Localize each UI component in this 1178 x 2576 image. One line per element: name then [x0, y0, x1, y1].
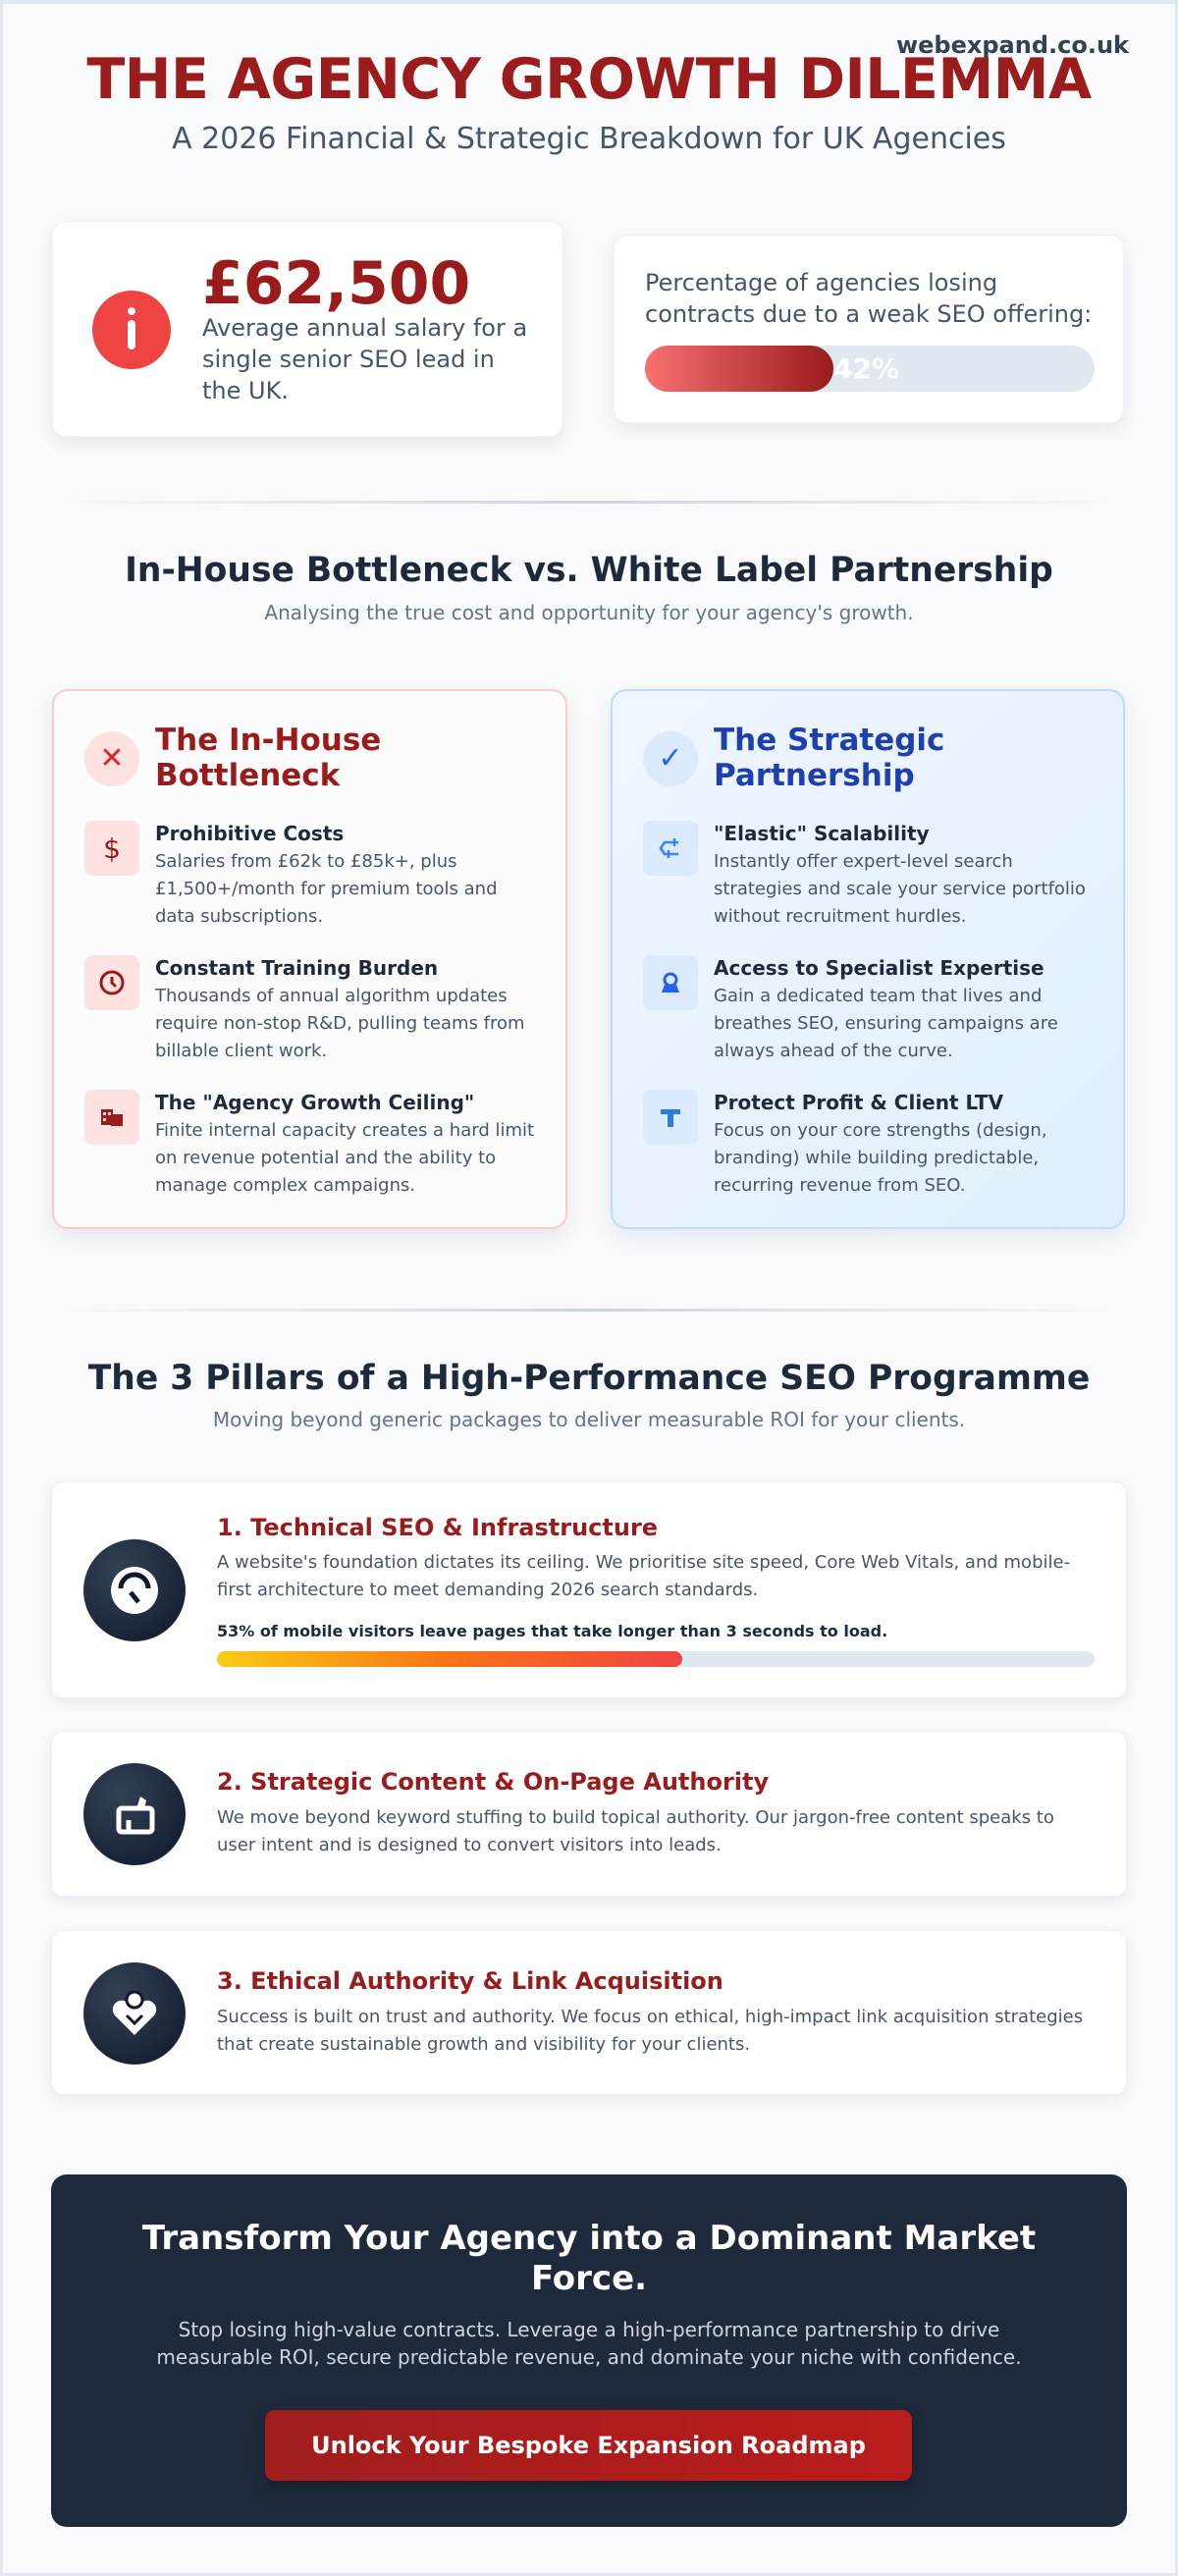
item: expertise: Gain a dedicated team that lives and breathes SEO, ensuring campaigns are always ahead of the curve. — [714, 986, 1058, 1061]
CTA panel — [51, 2174, 1127, 2527]
item: costs — [84, 821, 497, 927]
item: scalability: "Elastic" Scalability — [714, 822, 930, 845]
panel: partnership — [611, 689, 1125, 1229]
panel title: Partnership — [714, 758, 915, 793]
progress bar 42%: 42% — [833, 352, 899, 385]
title: THE AGENCY GROWTH DILEMMA — [86, 47, 1092, 112]
icon: info — [92, 291, 171, 369]
item: costs: $ — [103, 832, 121, 864]
icon: cross: ✕ — [99, 741, 125, 776]
panel title: The In-House — [155, 723, 381, 758]
panel title — [714, 723, 944, 793]
icon: heart handshake — [83, 1962, 186, 2065]
item: profit: Protect Profit & Client LTV — [714, 1091, 1003, 1114]
icon: check — [643, 731, 698, 786]
panel title: Bottleneck — [155, 758, 340, 793]
panel title — [155, 723, 381, 793]
brand url: webexpand.co.uk — [896, 31, 1129, 59]
icon: thumbs up — [83, 1763, 186, 1865]
icon: gauge — [83, 1539, 186, 1641]
pillar text: A website's foundation dictates its ceiling. We prioritise site speed, Core Web Vitals, and mobile-first architecture to meet demanding 2026 search standards. — [217, 1552, 1070, 1600]
item: expertise: Access to Specialist Expertise — [714, 956, 1044, 980]
CTA button — [265, 2410, 912, 2481]
pillar 2 — [51, 1731, 1127, 1897]
pillar title: 3. Ethical Authority & Link Acquisition — [217, 1967, 723, 1995]
stat card: salary — [52, 221, 563, 437]
section subtitle: Analysing the true cost and opportunity for your agency's growth. — [264, 601, 914, 624]
pillar text: We move beyond keyword stuffing to build topical authority. Our jargon-free content speaks to user intent and is designed to convert visitors into leads. — [217, 1807, 1054, 1855]
item: training: Constant Training Burden — [155, 956, 438, 980]
item: ceiling: Finite internal capacity creates a hard limit on revenue potential and the ability to manage complex campaigns. — [155, 1120, 534, 1196]
item: profit: Focus on your core strengths (design, branding) while building predictable, recurring revenue from SEO. — [714, 1120, 1047, 1196]
item: ceiling: The "Agency Growth Ceiling" — [155, 1091, 474, 1114]
item: costs: Salaries from £62k to £85k+, plus £1,500+/month for premium tools and data subscriptions. — [155, 851, 497, 927]
item: training — [84, 955, 525, 1061]
section subtitle: Moving beyond generic packages to deliver measurable ROI for your clients. — [213, 1408, 965, 1431]
salary description: Average annual salary for a single senior SEO lead in the UK. — [202, 314, 527, 404]
salary figure: £62,500 — [202, 249, 470, 318]
item: ceiling — [84, 1090, 534, 1196]
pillar text: Success is built on trust and authority. We focus on ethical, high-impact link acquisition strategies that create sustainable growth and visibility for your clients. — [217, 2007, 1083, 2055]
section heading: pillars: The 3 Pillars of a High-Performance SEO Programme — [88, 1359, 1090, 1398]
stat label: Percentage of agencies losing contracts due to a weak SEO offering: — [645, 269, 1092, 328]
CTA text: Stop losing high-value contracts. Leverage a high-performance partnership to drive measurable ROI, secure predictable revenue, and dominate your niche with confidence. — [156, 2318, 1022, 2369]
item: training: Thousands of annual algorithm updates require non-stop R&D, pulling teams from billable client work. — [155, 986, 525, 1061]
item: scalability: Instantly offer expert-level search strategies and scale your service portfolio without recruitment hurdles. — [714, 851, 1086, 927]
CTA button: Unlock Your Bespoke Expansion Roadmap — [311, 2432, 866, 2459]
pillar 1 — [51, 1481, 1127, 1698]
item: scalability — [643, 821, 1086, 927]
pillar 3 — [51, 1930, 1127, 2095]
bar 53% — [217, 1651, 1095, 1667]
progress bar 42% — [645, 346, 1095, 392]
icon: cross — [84, 731, 139, 786]
section heading: comparison: In-House Bottleneck vs. White Label Partnership — [125, 551, 1053, 590]
item: expertise — [643, 955, 1058, 1061]
item: profit — [643, 1090, 1047, 1196]
stat: 53% of mobile visitors leave pages that take longer than 3 seconds to load. — [217, 1622, 887, 1640]
stat card: contracts lost — [614, 235, 1124, 423]
icon: check: ✓ — [658, 741, 683, 776]
CTA heading: Transform Your Agency into a Dominant Market Force. — [142, 2219, 1036, 2298]
subtitle: A 2026 Financial & Strategic Breakdown for UK Agencies — [172, 122, 1006, 156]
panel: in-house — [52, 689, 567, 1229]
panel title: The Strategic — [714, 723, 944, 758]
item: costs: Prohibitive Costs — [155, 822, 344, 845]
pillar title: 2. Strategic Content & On-Page Authority — [217, 1768, 769, 1796]
pillar title: 1. Technical SEO & Infrastructure — [217, 1514, 658, 1541]
